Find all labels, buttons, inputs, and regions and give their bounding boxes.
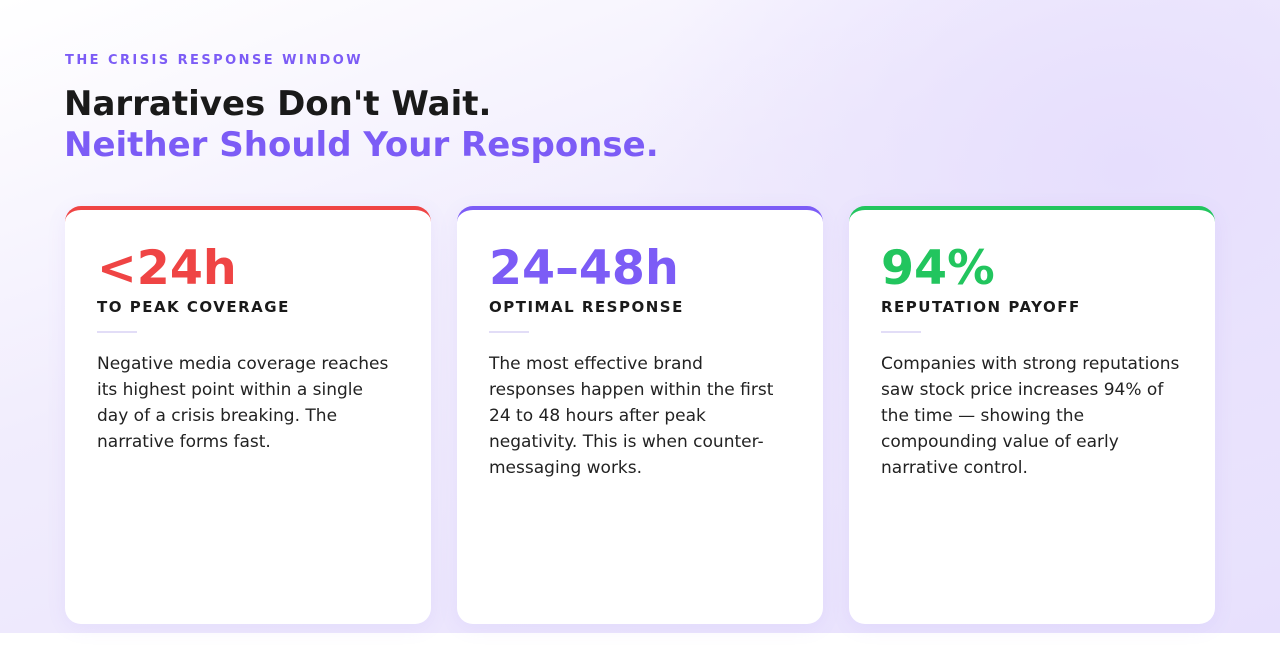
panel: peak coverage [65, 206, 431, 624]
text: The most effective brand responses happen within the first 24 to 48 hours after peak negativity. This is when counter-messaging works. [489, 354, 773, 478]
panel: reputation payoff [849, 206, 1215, 624]
text: Negative media coverage reaches its highest point within a single day of a crisis breaking. The narrative forms fast. [97, 354, 388, 452]
label: TO PEAK COVERAGE [97, 298, 290, 316]
stat: 24–48h: 24–48h [489, 241, 679, 296]
label: REPUTATION PAYOFF [881, 298, 1081, 316]
title: Narratives Don't Wait. [64, 84, 491, 124]
text: Companies with strong reputations saw stock price increases 94% of the time — showing the compounding value of early narrative control. [881, 354, 1179, 478]
stat: <24h: <24h [97, 241, 237, 296]
title: Neither Should Your Response. [64, 125, 659, 165]
title [64, 84, 659, 165]
label: OPTIMAL RESPONSE [489, 298, 684, 316]
eyebrow: THE CRISIS RESPONSE WINDOW [65, 53, 363, 68]
stat: 94%: 94% [881, 241, 995, 296]
panel: optimal response [457, 206, 823, 624]
